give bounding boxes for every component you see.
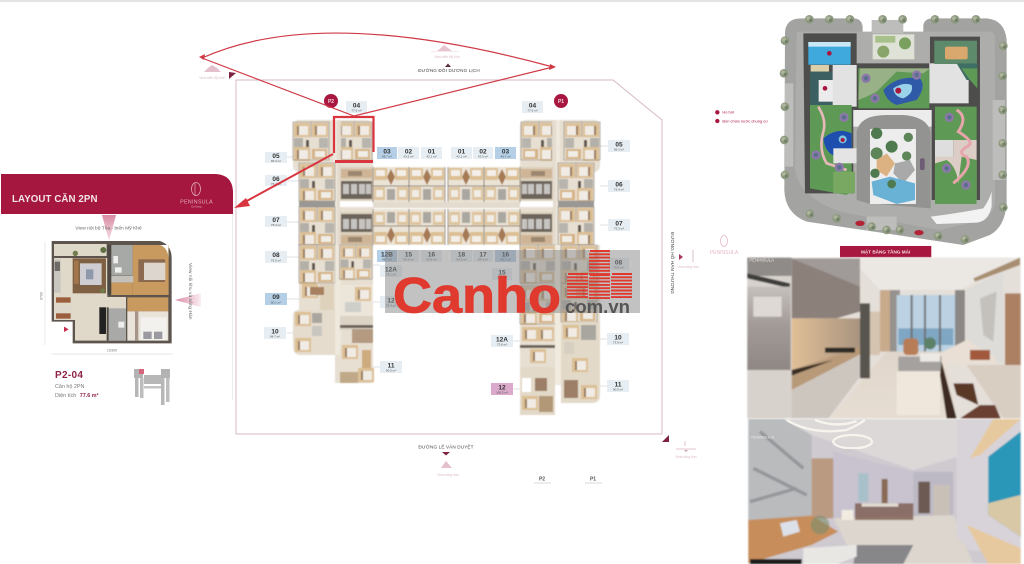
- icon: view top left: [199, 65, 225, 80]
- road ring: [784, 18, 1007, 245]
- arrow heads on arc: [199, 54, 556, 70]
- unit label 15: [398, 250, 419, 262]
- unit label 06 right: 06: [615, 182, 623, 188]
- icon: view top left: View biển Mỹ Khê: [199, 76, 225, 80]
- unit label 15 right: 75.4 m²: [497, 276, 507, 280]
- unit label 12B: [377, 250, 397, 262]
- corner marker bottom-right: [662, 435, 669, 442]
- unit label 12A right: 73.8 m²: [497, 342, 507, 346]
- unit label 12 right: [491, 383, 513, 395]
- legend: pool and water tank: Hồ bơi: [722, 110, 734, 115]
- unit label 12 right: 106.5 m²: [496, 390, 508, 394]
- badge: P1: P1: [558, 99, 564, 105]
- unit label 05 left: [265, 152, 287, 163]
- unit label 11 left: 90.5 m²: [386, 368, 396, 372]
- unit label 07 left: 75.3 m²: [271, 223, 281, 227]
- unit label 15 right: [492, 268, 512, 280]
- watermark gray panel: [385, 250, 640, 313]
- unit label 04 P1: 77.6 m²: [527, 108, 538, 112]
- badge: P1: [554, 94, 568, 108]
- unit label 04 P1: [522, 101, 543, 113]
- unit label 02 left: 43.5 m²: [403, 154, 414, 158]
- unit label 15: 15: [405, 252, 412, 258]
- legend: pool and water tank: [715, 110, 768, 123]
- unit label 09 left: [265, 293, 287, 305]
- unit label 15: 54.3 m²: [403, 258, 414, 262]
- badge: P2: [324, 94, 338, 108]
- legend: tower P1: [585, 476, 602, 483]
- red entry marker: [64, 327, 69, 332]
- arrow: top view cone: [102, 215, 116, 241]
- unit label 05 left: 96.3 m²: [271, 159, 281, 163]
- icon: view top center: View biển Mỹ Khê: [434, 55, 460, 59]
- street label: right vertical: ĐƯỜNG HỒ HÁN THƯƠNG: [670, 232, 676, 294]
- unit label 02 left: 02: [405, 148, 412, 156]
- red vehicles: [855, 221, 865, 226]
- unit label 16: 16: [428, 252, 435, 258]
- ceiling ring lights: [787, 420, 872, 448]
- parking strips: [785, 20, 1005, 230]
- unit label 11 right: 90.5 m²: [613, 388, 623, 392]
- unit label 12 left: 75.4 m²: [386, 304, 396, 308]
- unit label 12A right: [491, 335, 513, 347]
- unit label 03 right: [495, 147, 516, 159]
- tower P2 upper wing and center wing: [293, 120, 447, 248]
- unit label 02 right: 02: [479, 148, 487, 156]
- brand logo: Peninsula center-right: [710, 236, 739, 256]
- street label: bottom: ĐƯỜNG LÊ VĂN DUYỆT: [418, 442, 474, 450]
- unit label 09 left: 80.1 m²: [271, 300, 281, 304]
- unit label 01 right: [451, 147, 472, 159]
- unit label 11 right: [607, 380, 629, 392]
- icon: view top center: [431, 45, 460, 59]
- mini key plan: [134, 369, 170, 405]
- leader lines: [287, 146, 608, 389]
- unit label 03 left: 03: [383, 148, 391, 156]
- street label: bottom: View sông Hàn: [437, 473, 459, 477]
- unit label 12A left: [380, 265, 402, 277]
- unit label 10 right: 10: [614, 334, 622, 342]
- unit label 11 right: 11: [615, 382, 622, 388]
- floor plan: towers P2 and P1: [264, 94, 630, 415]
- view arc: [202, 33, 553, 67]
- red annotation: view sweep and highlight: [199, 33, 556, 208]
- corner marker top-left: [229, 72, 236, 79]
- unit label 12 left: [380, 296, 402, 308]
- unit label 10 left: 10: [271, 328, 279, 336]
- unit label 07 right: 75.3 m²: [614, 226, 624, 230]
- right top garden with courts: [934, 41, 977, 64]
- watermark domain: com.vn: [565, 296, 630, 317]
- unit label 05 right: 05: [615, 142, 623, 148]
- unit label 08 right: 75.5 m²: [613, 266, 624, 270]
- unit label 16 blue: 16: [502, 252, 509, 258]
- arrow: right view cone: [175, 293, 201, 307]
- unit label 06 right: [608, 180, 630, 192]
- unit label 12A left: 73.1 m²: [386, 272, 396, 276]
- unit label 12A right: 12A: [496, 336, 508, 344]
- unit label 04 P2: [346, 101, 367, 113]
- unit label 01 left: [421, 147, 442, 159]
- unit label 08 left: [265, 251, 287, 263]
- unit label 18: [451, 250, 472, 262]
- unit label 02 left: [398, 147, 419, 159]
- unit label 11 left: [380, 361, 402, 373]
- brand logo: Peninsula: [180, 182, 213, 208]
- icon: view right: [677, 250, 699, 269]
- swimming pool: [808, 42, 851, 65]
- unit label 04 P2: 04: [353, 102, 360, 110]
- highlight box on unit P2-04: [334, 117, 374, 153]
- tower P1 upper wing and center wing: [446, 120, 600, 248]
- unit label 05 right: [608, 140, 630, 152]
- unit label 01 right: 42.1 m²: [456, 154, 467, 158]
- unit label 05 right: 96.3 m²: [614, 148, 624, 152]
- watermark building icon: [567, 251, 632, 298]
- unit label 03 left: 48.7 m²: [382, 154, 392, 158]
- unit label 11 left: 11: [388, 362, 395, 370]
- site boundary: [236, 80, 662, 434]
- icon: view bottom right: [675, 441, 697, 459]
- unit label 16: 54.9 m²: [426, 258, 437, 262]
- unit label 07 left: 07: [272, 217, 280, 224]
- unit label 08 left: 75.5 m²: [271, 258, 281, 262]
- photo: living and dining room: [748, 419, 1021, 564]
- unit label 01 left: 42.1 m²: [426, 154, 437, 158]
- apartment area: Diện tích 77.6 m²: [55, 393, 99, 399]
- unit label 05 left: 05: [272, 153, 280, 160]
- panel: layout of 2-bedroom apartment: [1, 174, 233, 405]
- brand logo: Peninsula: Da Nang: [191, 204, 202, 208]
- unit label 08 left: 08: [272, 252, 280, 259]
- unit label 07 right: [608, 219, 630, 231]
- apartment type: Căn hộ 2PN: [55, 384, 84, 390]
- legend: tower P2: P2: [539, 476, 545, 482]
- terrace tiles: [811, 65, 829, 72]
- unit label 17: 17: [479, 252, 487, 258]
- unit label 07 left: [265, 216, 287, 227]
- photo: kitchen and living room: [747, 258, 1021, 418]
- unit label 03 left: [377, 147, 397, 159]
- unit label 07 right: 07: [615, 220, 623, 228]
- unit label 12B: 48.7 m²: [382, 258, 392, 262]
- brand logo: Peninsula: PENINSULA: [180, 200, 213, 206]
- unit label 12B: 12B: [381, 252, 393, 258]
- unit label 06 left: 06: [272, 176, 280, 183]
- legend: pool and water tank: Bồn chứa nước chung cư: [722, 118, 768, 123]
- unit label 10 left: 94.7 m²: [270, 334, 280, 338]
- central forecourt: [853, 110, 932, 127]
- right garden: [935, 107, 977, 140]
- icon: view right: View sông Hàn: [677, 265, 699, 269]
- unit label 10 right: 73.8 m²: [613, 340, 623, 344]
- street label: top: [418, 64, 480, 73]
- top small garden: [873, 34, 914, 59]
- unit label 16: [421, 250, 442, 262]
- unit label 06 left: 75.4 m²: [271, 182, 281, 186]
- unit label 12 left: 12: [387, 298, 395, 304]
- apartment code: P2-04: [55, 370, 83, 381]
- legend: tower P2: [534, 476, 551, 483]
- floor plan thumbnail: [40, 241, 173, 354]
- view label right: View nội khu và sông Hàn: [187, 263, 193, 320]
- unit label 17: [473, 250, 493, 262]
- logo mark on photo: PENINSULA: [751, 434, 774, 439]
- brand logo: Peninsula center-right: PENINSULA: [710, 250, 739, 256]
- badge: P2: P2: [328, 99, 334, 105]
- unit label 10 left: [264, 327, 286, 339]
- unit label 12 right: 12: [498, 384, 506, 392]
- unit label 03 right: 03: [502, 148, 509, 156]
- heading band: layout căn 2PN: LAYOUT CĂN 2PN: [12, 194, 98, 205]
- unit label 16 blue: [495, 250, 516, 262]
- floor plan thumbnail: 9700: [40, 292, 44, 300]
- panel divider: [232, 214, 234, 400]
- street label: bottom: [418, 442, 474, 477]
- heading band: layout căn 2PN: [1, 174, 233, 214]
- unit label 02 right: [473, 147, 493, 159]
- unit label 18: 54.3 m²: [456, 258, 467, 262]
- icon: view bottom right: View sông Hàn: [675, 455, 697, 459]
- legend: tower P1: P1: [590, 476, 596, 482]
- unit label 06 left: [265, 175, 287, 186]
- bottom white terrace: [931, 192, 992, 224]
- unit label 04 P2: 77.6 m²: [351, 108, 362, 112]
- unit label 04 P1: 04: [529, 102, 536, 110]
- unit label 10 right: [607, 333, 629, 345]
- tower P1 lower wing: [520, 245, 600, 415]
- button: rooftop plan caption: MẶT BẰNG TẦNG MÁI: [861, 247, 910, 254]
- button: rooftop plan caption: [840, 246, 931, 257]
- unit label 12A left: 12A: [385, 266, 397, 274]
- view rays: [202, 58, 553, 116]
- central garden: [858, 68, 929, 108]
- left garden: [810, 105, 852, 195]
- unit label 17: 54.3 m²: [478, 258, 488, 262]
- dimension lines: [45, 242, 173, 354]
- floor plan thumbnail: 10300: [107, 348, 117, 352]
- watermark word Canho: Canho: [393, 268, 561, 324]
- unit label 08 right: [608, 258, 629, 270]
- logo mark on photo: PENINSULA: [749, 258, 774, 263]
- watermark: Canho.com.vn: [385, 250, 640, 324]
- unit label 06 right: 75.4 m²: [614, 188, 624, 192]
- arrow to layout panel: [243, 154, 333, 203]
- unit label 03 right: 48.7 m²: [500, 154, 511, 158]
- unit label 15 right: 15: [498, 270, 506, 276]
- unit label 16 blue: 48.7 m²: [500, 258, 511, 262]
- unit label 01 right: 01: [458, 148, 465, 156]
- unit label 08 right: 08: [615, 260, 622, 266]
- unit label 02 right: 43.5 m²: [478, 154, 488, 158]
- tower P2 lower wing: [293, 245, 374, 383]
- trees around site: [780, 15, 1008, 244]
- unit label 01 left: 01: [428, 148, 435, 156]
- unit label 09 left: 09: [272, 294, 280, 301]
- unit label 18: 18: [458, 252, 465, 258]
- building shadow frame: [803, 33, 980, 200]
- panel: rooftop site plan: [715, 15, 1008, 257]
- street label: top: ĐƯỜNG ĐÔI DƯƠNG LỊCH: [418, 67, 480, 73]
- view label top: View nội bộ Tòa - biển Mỹ Khê: [75, 224, 142, 232]
